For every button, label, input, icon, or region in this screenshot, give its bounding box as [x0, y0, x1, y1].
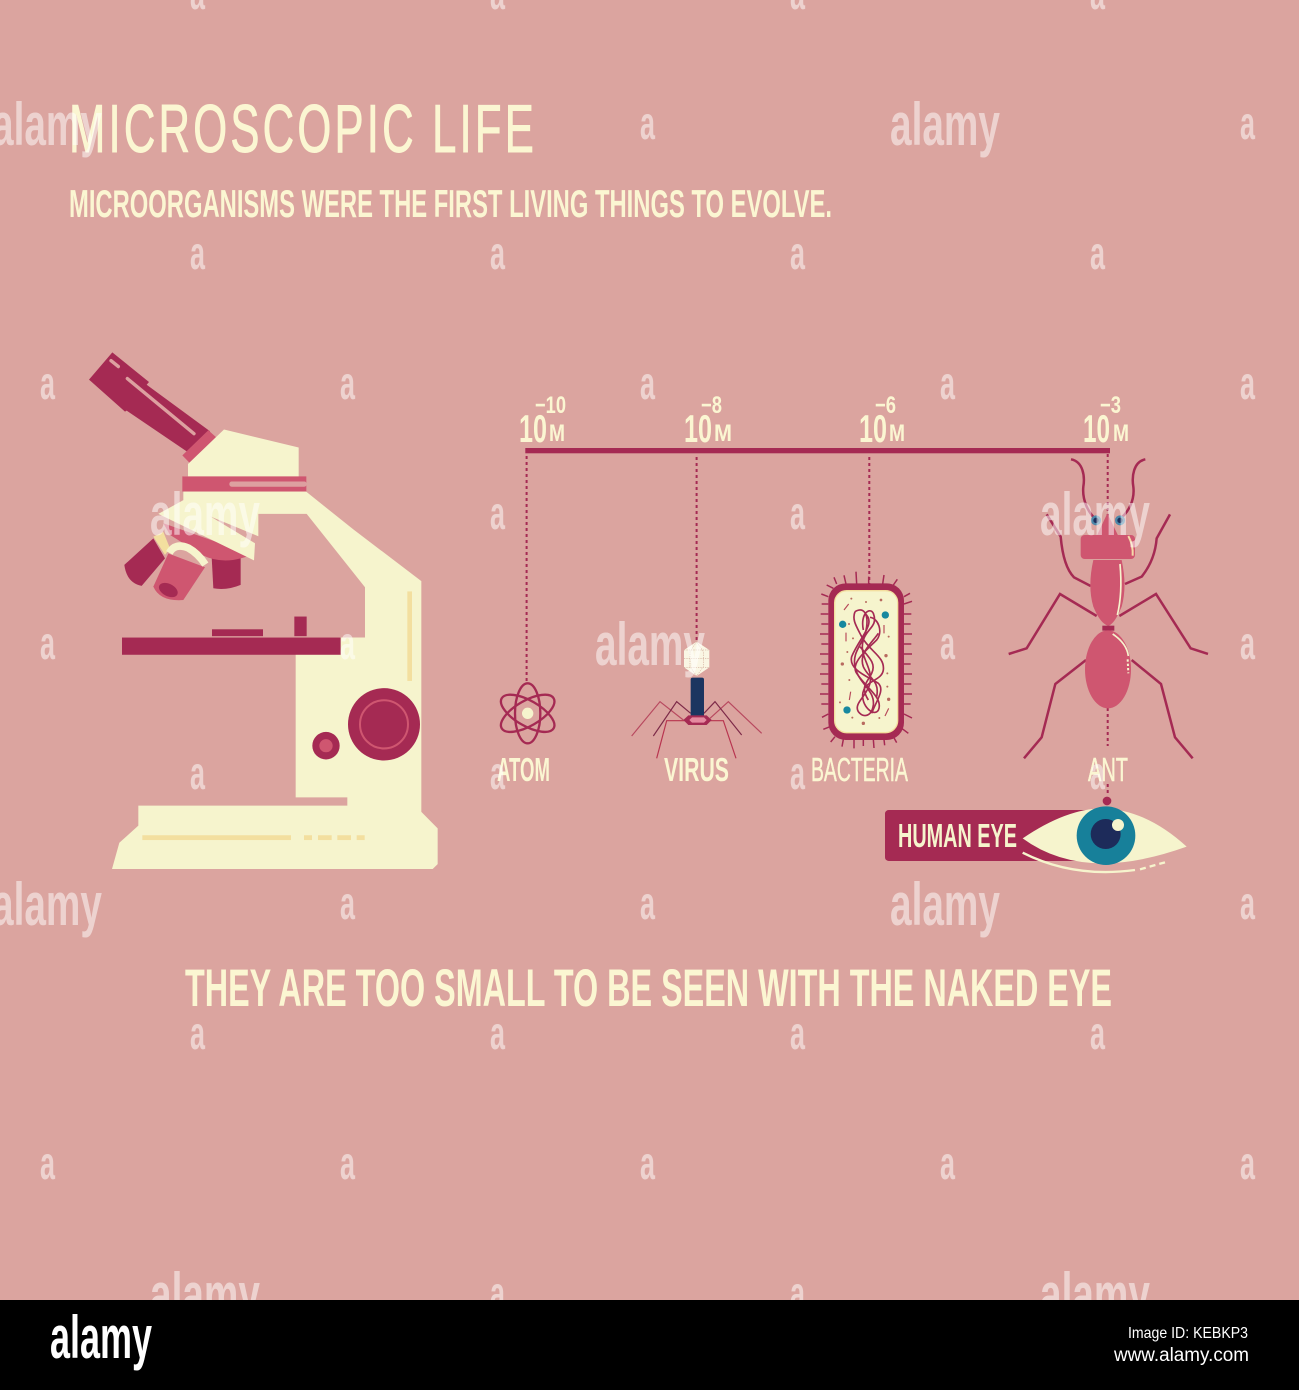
ant thorax	[1090, 560, 1124, 626]
watermarks: alamy	[595, 611, 705, 678]
watermarks: a	[790, 1007, 805, 1059]
watermarks: a	[190, 1007, 205, 1059]
scale label: 10^-6 m: M	[889, 420, 905, 447]
virus base	[683, 715, 712, 725]
scale label: 10^-8 m	[684, 392, 732, 451]
footer logo: alamy	[50, 1304, 152, 1371]
scale label: 10^-6 m	[859, 392, 905, 451]
watermarks: a	[940, 617, 955, 669]
watermarks: alamy	[1040, 481, 1150, 548]
bacteria organelles	[839, 598, 890, 725]
watermarks: a	[340, 877, 355, 929]
microscope stage	[122, 617, 341, 655]
scale label: 10^-8 m: −8	[701, 392, 722, 419]
atom icon	[495, 683, 560, 743]
title: MICROSCOPIC LIFE	[69, 91, 537, 167]
watermarks: a	[640, 877, 655, 929]
label: ant: ANT	[1088, 751, 1128, 788]
website: www.alamy.com	[1113, 1345, 1249, 1366]
scale label: 10^-8 m: M	[714, 420, 732, 447]
label: bacteria: BACTERIA	[811, 751, 908, 788]
watermarks: a	[190, 747, 205, 799]
watermarks: a	[640, 1137, 655, 1189]
label tab	[885, 810, 1088, 861]
objective lenses	[124, 500, 255, 600]
watermarks: alamy	[890, 91, 1000, 158]
virus icon	[632, 642, 762, 758]
watermarks: a	[340, 357, 355, 409]
watermarks: alamy	[150, 481, 260, 548]
watermarks: a	[1090, 1007, 1105, 1059]
connector dot	[1103, 797, 1111, 805]
ant legs	[1009, 514, 1208, 758]
ant abdomen	[1085, 630, 1131, 708]
watermarks: a	[490, 747, 505, 799]
scale label: 10^-8 m: 10	[684, 408, 712, 451]
scale label: 10^-10 m: M	[549, 420, 565, 447]
human eye callout	[885, 797, 1187, 872]
scale label: 10^-10 m	[519, 392, 566, 451]
scale label: 10^-3 m: −3	[1100, 392, 1121, 419]
watermarks: a	[490, 487, 505, 539]
bacteria DNA	[851, 610, 883, 716]
watermarks: a	[1240, 97, 1255, 149]
ant head	[1081, 513, 1135, 559]
scale label: 10^-3 m	[1083, 392, 1129, 451]
microscope eyepiece	[89, 352, 216, 463]
watermarks: a	[340, 1137, 355, 1189]
human eye label: HUMAN EYE	[898, 817, 1017, 854]
watermarks: a	[1090, 747, 1105, 799]
label: virus: VIRUS	[664, 751, 729, 788]
ant antennae	[1071, 459, 1145, 520]
image id: Image ID: KEBKP3	[1128, 1325, 1248, 1342]
virus head	[684, 642, 709, 676]
scale label: 10^-3 m: 10	[1083, 408, 1110, 451]
bacteria cytoplasm	[835, 591, 898, 733]
watermarks: a	[40, 617, 55, 669]
watermarks: a	[790, 1267, 805, 1319]
bacteria icon	[820, 572, 912, 748]
ant waist	[1102, 626, 1114, 631]
watermarks: a	[940, 357, 955, 409]
bacteria spikes	[820, 572, 912, 748]
dotted connector lines	[527, 454, 1108, 795]
watermarks: a	[490, 1267, 505, 1319]
scale bar	[525, 448, 1110, 453]
watermarks: a	[40, 357, 55, 409]
label: atom: ATOM	[497, 751, 550, 788]
iris	[1077, 806, 1135, 865]
watermarks: a	[1240, 1137, 1255, 1189]
virus legs	[632, 702, 762, 758]
watermarks: a	[40, 1137, 55, 1189]
eye white	[1023, 808, 1187, 863]
footer bar	[0, 1300, 1299, 1390]
watermarks: a	[790, 227, 805, 279]
watermarks: a	[1240, 877, 1255, 929]
scale label: 10^-6 m: 10	[859, 408, 887, 451]
ant eyes	[1091, 515, 1125, 525]
watermarks: alamy	[150, 1261, 260, 1328]
watermarks: alamy	[1040, 1261, 1150, 1328]
watermarks: alamy	[890, 871, 1000, 938]
watermarks: a	[490, 1007, 505, 1059]
watermarks: a	[790, 747, 805, 799]
focus knobs	[312, 688, 420, 761]
watermarks: a	[640, 97, 655, 149]
watermarks: a	[190, 227, 205, 279]
bacteria cell wall	[828, 583, 904, 740]
microscope illustration	[89, 352, 438, 869]
microscope body and base	[112, 430, 438, 869]
watermarks: a	[490, 227, 505, 279]
watermarks: a	[1090, 227, 1105, 279]
watermarks: a	[640, 357, 655, 409]
scale label: 10^-10 m: 10	[519, 408, 547, 451]
body highlight lines	[142, 591, 412, 840]
watermarks: a	[340, 617, 355, 669]
watermarks: a	[1240, 617, 1255, 669]
scale label: 10^-6 m: −6	[875, 392, 896, 419]
microscope band	[182, 476, 307, 492]
watermarks: a	[940, 1137, 955, 1189]
watermarks: a	[1240, 357, 1255, 409]
lower lid lines	[1023, 853, 1165, 872]
subtitle: MICROORGANISMS WERE THE FIRST LIVING THINGS TO EVOLVE.	[69, 183, 832, 226]
scale label: 10^-10 m: −10	[535, 392, 566, 419]
ant icon	[1009, 459, 1208, 758]
virus tail	[691, 678, 704, 718]
watermarks: a	[790, 487, 805, 539]
scale label: 10^-3 m: M	[1113, 420, 1129, 447]
